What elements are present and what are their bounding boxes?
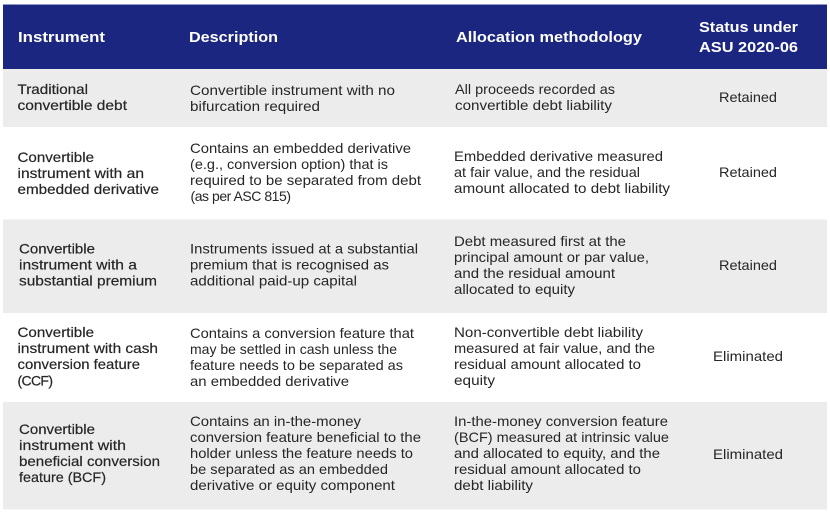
row: substantial premium: and the residual amount	[454, 265, 615, 281]
row: substantial premium: substantial premium	[19, 272, 157, 288]
row: cash conversion feature: an embedded derivative	[190, 373, 349, 389]
row: beneficial conversion feature: Convertible	[19, 421, 95, 437]
row: beneficial conversion feature: feature (BCF)	[19, 469, 106, 485]
row: embedded derivative: Retained	[719, 164, 777, 180]
header row: ASU 2020-06	[699, 39, 798, 56]
row: cash conversion feature	[18, 324, 783, 389]
row: beneficial conversion feature: be separated as an embedded	[190, 461, 388, 477]
row: traditional convertible debt: Traditional	[18, 81, 88, 97]
row: cash conversion feature: equity	[454, 372, 495, 388]
row: beneficial conversion feature: instrument with	[19, 437, 126, 453]
row: embedded derivative: instrument with an	[18, 165, 144, 181]
header row: Allocation methodology	[456, 29, 643, 46]
row: embedded derivative: Convertible	[18, 149, 94, 165]
row: traditional convertible debt	[3, 69, 827, 127]
row: traditional convertible debt: Convertible instrument with no	[190, 82, 395, 98]
row: beneficial conversion feature: beneficial conversion	[19, 453, 160, 469]
row: beneficial conversion feature: holder unless the feature needs to	[190, 445, 413, 461]
row: embedded derivative: (e.g., conversion option) that is	[190, 156, 388, 172]
header row: Description	[189, 29, 278, 46]
row: beneficial conversion feature: Contains an in-the-money	[190, 413, 361, 429]
row: substantial premium: Convertible	[19, 240, 95, 256]
row: embedded derivative: (as per ASC 815)	[190, 188, 291, 204]
row: traditional convertible debt: All proceeds recorded as	[455, 81, 615, 97]
row: embedded derivative: embedded derivative	[18, 181, 159, 197]
row: cash conversion feature: feature needs to be separated as	[190, 357, 403, 373]
header row	[3, 4, 827, 69]
row: substantial premium: premium that is recognised as	[190, 256, 389, 272]
row: beneficial conversion feature: residual amount allocated to	[454, 461, 641, 477]
row: beneficial conversion feature: and allocated to equity, and the	[454, 445, 660, 461]
row: beneficial conversion feature: Eliminated	[713, 446, 783, 462]
row: beneficial conversion feature: debt liability	[454, 477, 533, 493]
row: traditional convertible debt: convertible debt	[18, 97, 127, 113]
row: embedded derivative: Contains an embedded derivative	[190, 140, 411, 156]
row: substantial premium	[3, 220, 827, 313]
row: embedded derivative: amount allocated to debt liability	[454, 180, 670, 196]
row: traditional convertible debt: Retained	[719, 89, 777, 105]
row: cash conversion feature: (CCF)	[18, 372, 53, 388]
row: cash conversion feature: Convertible	[18, 324, 94, 340]
row: embedded derivative: required to be separated from debt	[190, 172, 421, 188]
row: substantial premium: instrument with a	[19, 256, 137, 272]
row: cash conversion feature: Contains a conversion feature that	[190, 325, 414, 341]
row: beneficial conversion feature	[3, 402, 827, 510]
row: substantial premium: additional paid-up capital	[190, 272, 357, 288]
row: substantial premium: allocated to equity	[454, 281, 575, 297]
row: traditional convertible debt: convertible debt liability	[455, 97, 612, 113]
row: beneficial conversion feature: conversion feature beneficial to the	[190, 429, 421, 445]
row: embedded derivative	[18, 140, 777, 204]
header row: Status under	[699, 19, 798, 36]
row: embedded derivative: Embedded derivative measured	[454, 148, 663, 164]
row: substantial premium: Debt measured first at the	[454, 233, 626, 249]
row: substantial premium: Instruments issued at a substantial	[190, 240, 418, 256]
row: cash conversion feature: Eliminated	[713, 348, 783, 364]
row: cash conversion feature: instrument with cash	[18, 340, 158, 356]
row: embedded derivative: at fair value, and the residual	[454, 164, 640, 180]
header row: Instrument	[18, 29, 105, 46]
row: cash conversion feature: may be settled in cash unless the	[190, 341, 397, 357]
row: cash conversion feature: residual amount allocated to	[454, 356, 641, 372]
row: cash conversion feature: measured at fair value, and the	[454, 340, 655, 356]
row: cash conversion feature: conversion feature	[18, 356, 140, 372]
row: substantial premium: principal amount or par value,	[454, 249, 649, 265]
row: beneficial conversion feature: derivative or equity component	[190, 477, 395, 493]
row: beneficial conversion feature: In-the-money conversion feature	[454, 413, 668, 429]
row: traditional convertible debt: bifurcation required	[190, 98, 320, 114]
row: substantial premium: Retained	[719, 257, 777, 273]
row: cash conversion feature: Non-convertible debt liability	[454, 324, 643, 340]
row: beneficial conversion feature: (BCF) measured at intrinsic value	[454, 429, 669, 445]
